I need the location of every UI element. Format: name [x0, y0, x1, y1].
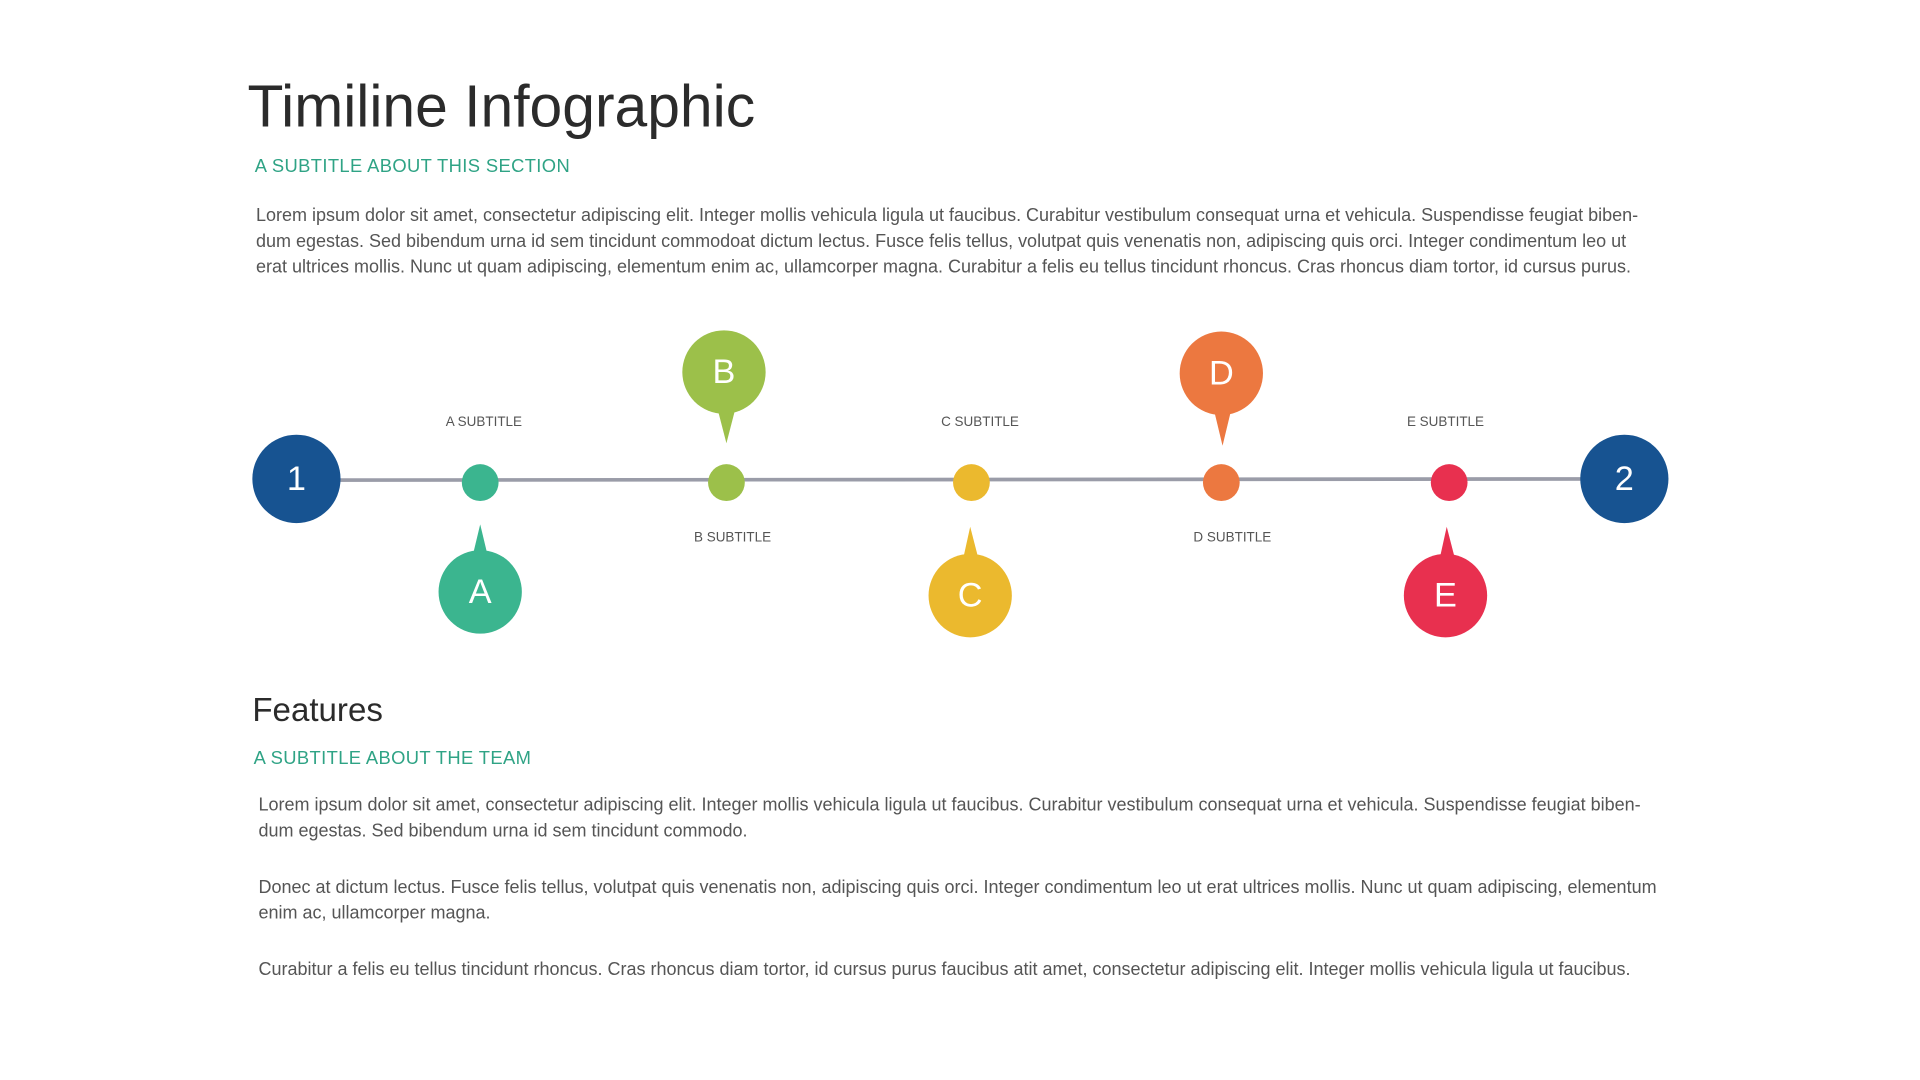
milestone E — [1404, 414, 1487, 637]
subtitle: section: A SUBTITLE ABOUT THIS SECTION — [255, 156, 570, 177]
features paragraph 1: Lorem ipsum dolor sit amet, consectetur adipiscing elit. Integer mollis vehicula ligula ut faucibus. Curabitur vestibulum consequat urna et vehicula. Suspendisse feugiat biben- — [258, 796, 1641, 815]
subtitle: team: A SUBTITLE ABOUT THE TEAM — [254, 748, 531, 769]
milestone C: C — [958, 577, 983, 615]
features heading: Features — [252, 691, 383, 728]
features paragraph 2: enim ac, ullamcorper magna. — [258, 904, 490, 923]
start node 1: 1 — [287, 460, 306, 498]
milestone A: A SUBTITLE — [446, 414, 522, 429]
features paragraph 1: dum egestas. Sed bibendum urna id sem tincidunt commodo. — [258, 822, 748, 841]
features paragraph 2: Donec at dictum lectus. Fusce felis tellus, volutpat quis venenatis non, adipiscing quis orci. Integer condimentum leo ut erat ultrices mollis. Nunc ut quam adipiscing, elementum — [258, 878, 1657, 898]
title: Timiline Infographic — [247, 75, 755, 140]
milestone E: E SUBTITLE — [1407, 414, 1484, 429]
milestone D: D — [1209, 354, 1234, 392]
start node 1 — [252, 435, 341, 523]
milestone A: A — [469, 573, 492, 611]
intro paragraph: erat ultrices mollis. Nunc ut quam adipiscing, elementum enim ac, ullamcorper magna. Curabitur a felis eu tellus tincidunt rhoncus. Cras rhoncus diam tortor, id cursus purus. — [256, 258, 1631, 278]
milestone B: B — [713, 353, 735, 391]
milestone B — [682, 330, 771, 545]
features paragraph 2 — [258, 878, 1657, 923]
features paragraph 1 — [258, 796, 1641, 841]
intro paragraph: Lorem ipsum dolor sit amet, consectetur adipiscing elit. Integer mollis vehicula ligula ut faucibus. Curabitur vestibulum consequat urna et vehicula. Suspendisse feugiat biben- — [256, 206, 1638, 226]
milestone B: B SUBTITLE — [694, 530, 771, 545]
intro paragraph: dum egestas. Sed bibendum urna id sem tincidunt commodoat dictum lectus. Fusce felis tellus, volutpat quis venenatis non, adipiscing quis orci. Integer condimentum leo ut — [256, 232, 1626, 252]
timeline line — [296, 479, 1624, 480]
end node 2 — [1580, 435, 1668, 523]
milestone D: D SUBTITLE — [1193, 530, 1271, 545]
milestone D — [1180, 332, 1271, 545]
milestone C — [929, 414, 1019, 637]
milestone E: E — [1434, 577, 1457, 615]
features paragraph 3: Curabitur a felis eu tellus tincidunt rhoncus. Cras rhoncus diam tortor, id cursus purus faucibus atit amet, consectetur adipiscing elit. Integer mollis vehicula ligula ut faucibus. — [258, 960, 1631, 980]
end node 2: 2 — [1615, 460, 1634, 498]
milestone A — [439, 414, 522, 634]
milestone C: C SUBTITLE — [941, 414, 1019, 429]
intro paragraph — [256, 206, 1638, 278]
